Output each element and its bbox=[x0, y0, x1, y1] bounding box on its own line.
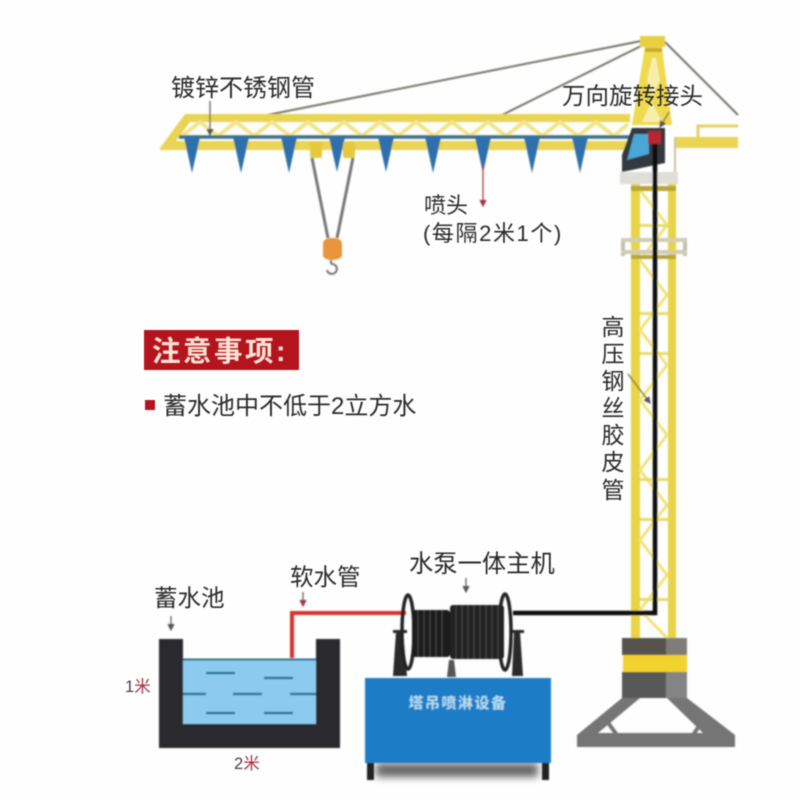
label: high-pressure rubber hose: 丝 bbox=[602, 395, 624, 421]
label: pump unit: 水泵一体主机 bbox=[409, 551, 555, 578]
label: high-pressure rubber hose bbox=[602, 314, 624, 503]
label: high-pressure rubber hose: 管 bbox=[602, 477, 624, 503]
label: high-pressure rubber hose: 皮 bbox=[602, 449, 624, 475]
operator cab bbox=[622, 128, 665, 172]
hose reel bbox=[393, 594, 524, 677]
pump tank bbox=[365, 678, 551, 780]
dimension: width: 2米 bbox=[234, 754, 260, 773]
storage pool bbox=[159, 639, 340, 748]
pointer arrows bbox=[171, 101, 669, 630]
counter jib bbox=[675, 126, 738, 172]
notice item: 蓄水池中不低于2立方水 bbox=[163, 393, 416, 420]
label: high-pressure rubber hose: 胶 bbox=[602, 422, 624, 448]
coiled hose bbox=[412, 610, 450, 657]
tower base bbox=[577, 638, 735, 747]
high-pressure hose bbox=[513, 144, 655, 613]
crane stay cables bbox=[252, 41, 738, 118]
galvanized pipe bbox=[179, 135, 632, 139]
water bbox=[183, 659, 316, 724]
label: high-pressure rubber hose: 压 bbox=[602, 341, 624, 367]
tower head bbox=[632, 36, 672, 125]
jib truss bbox=[160, 114, 630, 150]
spray nozzles bbox=[184, 137, 588, 173]
label: spray head: (每隔2米1个) bbox=[423, 221, 563, 246]
notice heading: 注意事项: bbox=[152, 336, 288, 368]
soft water hose bbox=[292, 613, 406, 658]
label: swivel joint: 万向旋转接头 bbox=[562, 83, 703, 109]
label: spray head: 喷头 bbox=[424, 193, 468, 218]
dimension: height: 1米 bbox=[125, 677, 151, 696]
label: high-pressure rubber hose: 钢 bbox=[602, 368, 624, 394]
label: storage pool: 蓄水池 bbox=[154, 585, 224, 611]
reel flanges bbox=[402, 595, 414, 669]
water ripples bbox=[183, 673, 316, 713]
tank shadow bbox=[376, 763, 538, 777]
tank label: 塔吊喷淋设备 bbox=[408, 694, 508, 712]
mast bbox=[631, 183, 676, 638]
label: galvanized stainless steel pipe: 镀锌不锈钢管 bbox=[171, 75, 315, 102]
reel stands bbox=[393, 630, 524, 677]
operator platforms bbox=[620, 172, 687, 256]
label: high-pressure rubber hose: 高 bbox=[602, 314, 624, 340]
label: spray head bbox=[423, 193, 563, 246]
label: soft hose: 软水管 bbox=[290, 564, 360, 590]
swivel joint bbox=[648, 131, 661, 144]
hook assembly bbox=[310, 142, 355, 274]
tower crane bbox=[160, 36, 738, 747]
